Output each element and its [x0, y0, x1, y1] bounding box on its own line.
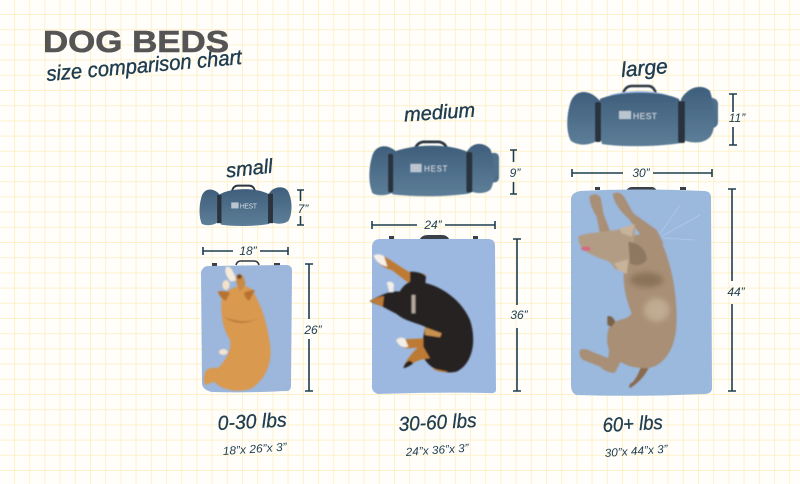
- title: [43, 24, 244, 86]
- bed: small: [201, 261, 292, 392]
- dimension: bed height 26 in: 26”: [303, 323, 323, 337]
- dog: black dog on medium bed: [369, 254, 473, 372]
- dimensions text: medium: 24”x 36”x 3”: [404, 443, 470, 459]
- dimension: bag height 7 in: 7”: [298, 202, 309, 216]
- dimension: bag height 11 in: 11”: [729, 111, 746, 125]
- rolled bag: large: [567, 86, 718, 146]
- bed: medium: [372, 235, 496, 394]
- dimension: bed height 36 in: 36”: [510, 308, 529, 322]
- rolled bag: medium: [369, 142, 499, 196]
- subtitle: size comparison chart: [45, 46, 244, 86]
- heading: dog beds: DOG BEDS: [43, 24, 229, 59]
- rolled bag: medium: HEST: [424, 165, 448, 174]
- weight: 60+ lbs: 60+ lbs: [602, 412, 663, 437]
- dimension: bed height 44 in: 44”: [727, 285, 746, 299]
- label: small: small: [225, 156, 274, 182]
- panel: small bed: [200, 156, 323, 458]
- dimension: width 30 in: [572, 166, 712, 180]
- label: large: large: [620, 55, 669, 82]
- dimension: width 18 in: [203, 244, 288, 258]
- dimensions text: large: 30”x 44”x 3”: [604, 444, 669, 460]
- dimension: bed height 26 in: [303, 264, 323, 391]
- dog: weimaraner on large bed: [578, 192, 677, 388]
- dimension: bag height 9 in: [510, 150, 521, 194]
- dimension: width 24 in: 24”: [423, 218, 443, 232]
- panel: medium bed: [369, 100, 529, 459]
- dimension: width 24 in: [372, 218, 495, 232]
- weight: 30-60 lbs: 30-60 lbs: [398, 410, 477, 436]
- dimension: bag height 9 in: 9”: [510, 166, 521, 180]
- bed: large: [571, 187, 712, 396]
- label: medium: medium: [403, 100, 476, 126]
- dimension: width 18 in: 18”: [239, 244, 258, 258]
- dimensions text: small: 18”x 26”x 3”: [222, 441, 288, 458]
- panel: large bed: [567, 55, 746, 460]
- rolled bag: large: HEST: [633, 111, 657, 121]
- dog: shiba on small bed: [204, 267, 271, 391]
- dimension: width 30 in: 30”: [632, 166, 651, 180]
- dimension: bed height 36 in: [510, 239, 529, 391]
- dimension: bag height 11 in: [729, 94, 746, 145]
- dimension: bed height 44 in: [727, 189, 746, 391]
- rolled bag: small: [200, 186, 292, 226]
- dimension: bag height 7 in: [297, 190, 309, 225]
- weight: 0-30 lbs: 0-30 lbs: [217, 409, 287, 435]
- rolled bag: small: HEST: [240, 203, 258, 211]
